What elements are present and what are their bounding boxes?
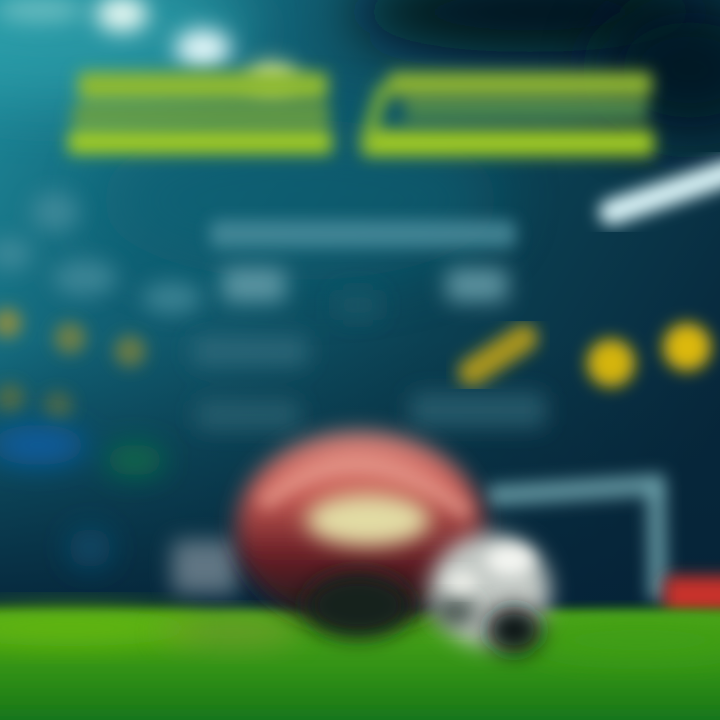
yellow dots right <box>587 323 711 387</box>
title <box>68 72 654 156</box>
blue and green legend blobs <box>0 425 165 568</box>
soccer ball <box>430 534 550 654</box>
column heading right <box>446 268 508 302</box>
yellow slanted capsule <box>472 338 524 372</box>
stadium lights <box>0 0 298 94</box>
goal frame <box>488 484 665 600</box>
left yellow dots <box>0 308 146 421</box>
red object at pitch edge <box>664 576 720 614</box>
cream centre patch <box>306 494 430 546</box>
left column text <box>0 192 202 314</box>
title line left <box>78 72 328 100</box>
subtitle <box>210 220 516 248</box>
title line right <box>388 72 652 96</box>
centre columns text <box>192 268 546 430</box>
column heading left <box>222 268 286 302</box>
streak of light <box>612 172 720 212</box>
title slash <box>358 84 392 144</box>
american football helmet <box>236 432 484 637</box>
grey object left of ball <box>172 540 238 594</box>
grass <box>0 610 720 720</box>
